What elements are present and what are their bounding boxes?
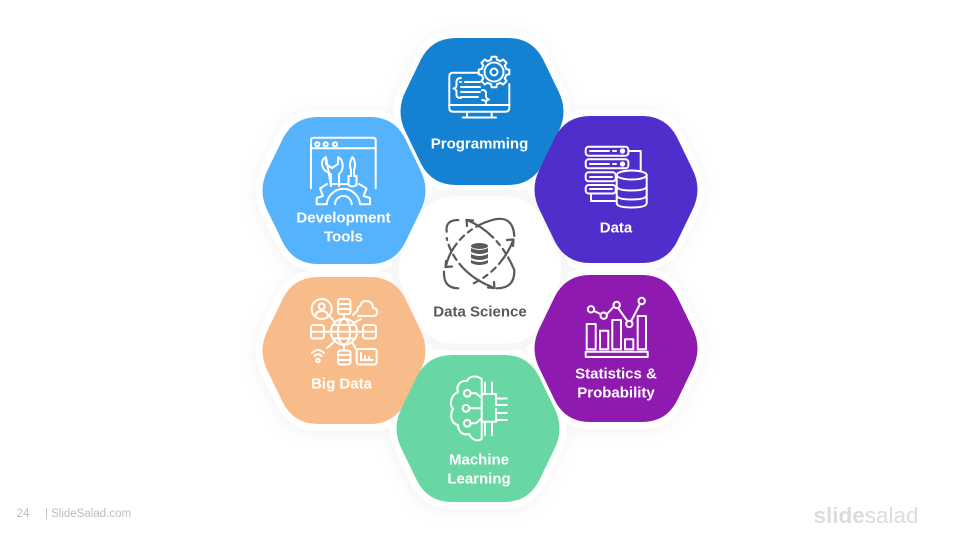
label: Machine Learning: Machine: [449, 452, 509, 468]
panel: Statistics & Probability: [534, 275, 698, 422]
panel: Development Tools: Tools: [324, 228, 363, 246]
label: Data Science: Data Science: [433, 304, 527, 320]
panel: Big Data: [262, 277, 426, 424]
icon: monitor with code and gear: [449, 57, 509, 118]
label: Programming: Programming: [431, 136, 528, 152]
label: Development Tools: Development: [296, 210, 391, 226]
logo: slidesalad: slidesalad: [813, 503, 919, 528]
panel: Data Science centre: [398, 196, 562, 344]
icon: globe network: [311, 299, 377, 364]
icon: bar chart with line: [586, 298, 648, 357]
page number and site footer: 24: [17, 508, 30, 520]
panel: Machine Learning: Learning: [447, 470, 511, 488]
icon: window with wrench, screwdriver and gear: [311, 138, 376, 204]
label: Data: Data: [600, 220, 633, 236]
panel: Machine Learning: [396, 355, 560, 502]
panel: Statistics & Probability: Probability: [577, 384, 655, 402]
icon: brain and chip: [451, 377, 507, 440]
icon: servers and database: [586, 147, 647, 208]
icon: orbits around database: [444, 219, 514, 288]
panel: Programming: [400, 38, 564, 185]
panel: Development Tools: [262, 117, 426, 264]
page number and site footer: | SlideSalad.com: [45, 508, 131, 520]
label: Statistics & Probability: Statistics &: [575, 366, 657, 382]
panel: Data: [534, 116, 698, 263]
label: Big Data: Big Data: [311, 376, 373, 392]
